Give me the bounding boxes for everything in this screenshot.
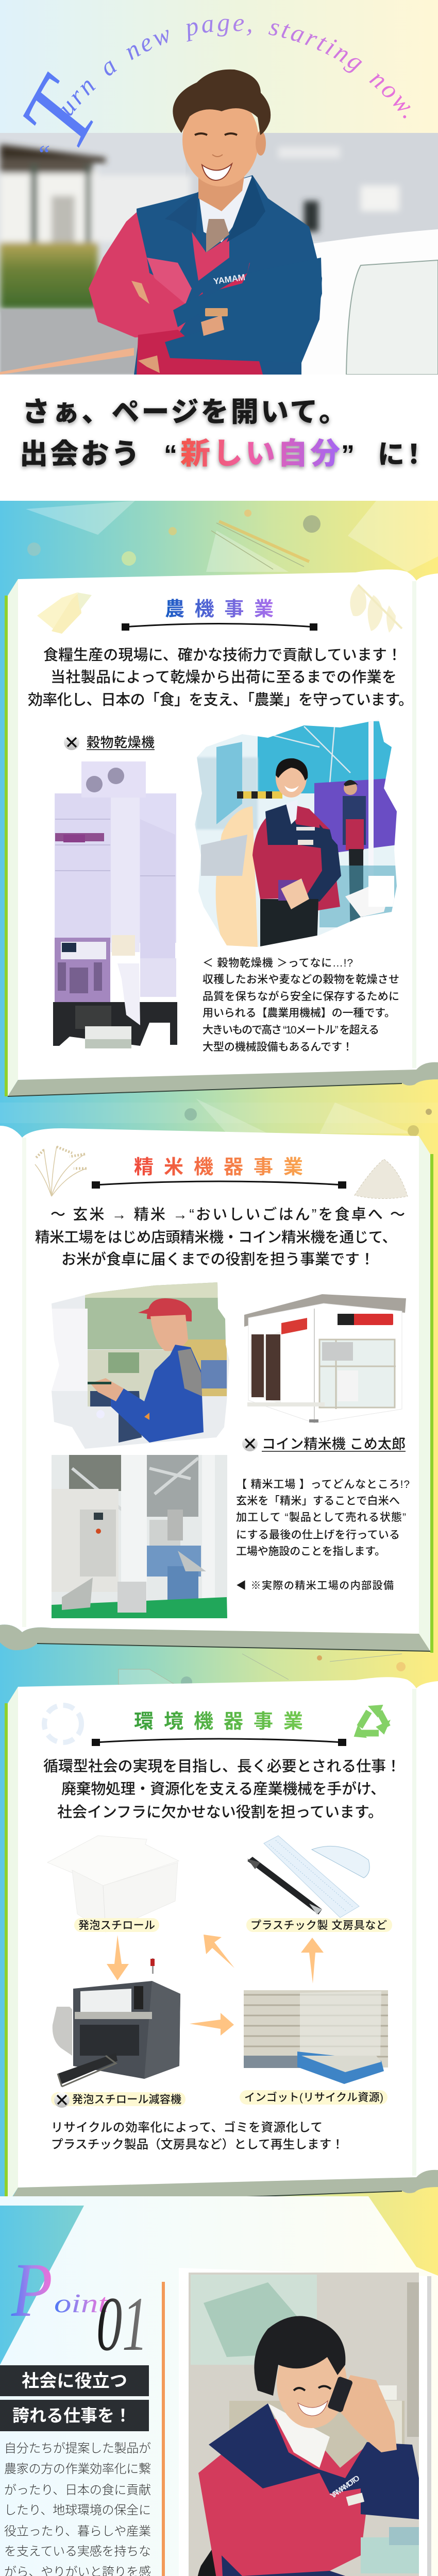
text block: what is a grain dryer: 収穫したお米や麦などの穀物を乾燥させ (203, 974, 399, 986)
point 01 heading: P (11, 2247, 53, 2333)
hero script text: Turn a new page, starting now.: “ (36, 140, 50, 168)
text block: what is a grain dryer: 用いられる【農業用機械】の一種です。 (203, 1007, 395, 1019)
point 01 heading bars: 社会に役立つ (22, 2371, 127, 2391)
text block: recycling explanation (51, 2121, 344, 2151)
text block: what is a rice mill: ◀ ※実際の精米工場の内部設備 (236, 1580, 394, 1591)
main headline: ” (341, 440, 355, 470)
pill: プラスチック製 文房具など: プラスチック製 文房具など (250, 1920, 387, 1931)
main headline: 新しい自分 (180, 437, 340, 470)
text block: rice milling intro: お米が食卓に届くまでの役割を担う事業です！ (61, 1251, 375, 1268)
text block: what is a grain dryer: 大型の機械設備もあるんです！ (203, 1041, 353, 1053)
text block: business intro: 効率化し、日本の「食」を支え、「農業」を守っています。 (28, 691, 413, 708)
text block: rice milling intro: ～ 玄米 → 精米 →“おいしいごはん”を食卓へ ～ (50, 1206, 405, 1223)
point 01 orange divider (162, 2282, 165, 2576)
point 01 heading bars (0, 2365, 149, 2431)
text block: what is a rice mill: 工場や施設のことを指します。 (236, 1546, 385, 1557)
arrow: up to stationery (301, 1938, 324, 1984)
text block: what is a rice mill (236, 1479, 410, 1591)
text block: business intro: 当社製品によって乾燥から出荷に至るまでの作業を (50, 669, 397, 686)
icon: rice grains pile (355, 1159, 408, 1199)
text block: what is a rice mill: 【 精米工場 】ってどんなところ!? (236, 1479, 410, 1490)
panel: agricultural machinery business book page (5, 569, 438, 1096)
heading: 精米機器事業: 精米機器事業 (134, 1157, 303, 1178)
point 01 body text: がったり、日本の食に貢献 (4, 2483, 151, 2497)
icon: corn (37, 592, 92, 634)
main headline (20, 397, 427, 470)
hero photo: smiling employee in front of white car: YAMAM (213, 273, 246, 286)
point 01 body text: を支えている実感を持ちな (4, 2545, 151, 2558)
connector (92, 1739, 346, 1746)
label: 穀物乾燥機: 穀物乾燥機 (87, 735, 155, 750)
point 01 heading: 01 (96, 2281, 148, 2367)
text block: what is a grain dryer (203, 957, 399, 1053)
point 01 body text (4, 2442, 151, 2576)
hero script text: Turn a new page, starting now. (0, 19, 410, 168)
photo: plastic stationery ruler protractor pen (247, 1836, 369, 1918)
heading: 農機事業: 農機事業 (165, 599, 274, 620)
arrow: right to ingots (190, 2013, 234, 2036)
label: コイン精米機 こめ太郎: コイン精米機 こめ太郎 (262, 1436, 406, 1452)
photo: pallets of recycled ingots (244, 1990, 388, 2084)
point 01 photo: employee on the phone (179, 2268, 431, 2576)
point 01 heading bars: 誇れる仕事を！ (12, 2406, 131, 2425)
text block: rice milling intro (35, 1206, 405, 1268)
panel: rice milling machinery business book page (0, 1126, 433, 1653)
pill: 発泡スチロール減容機: 発泡スチロール減容機 (72, 2094, 181, 2106)
pill: インゴット(リサイクル資源): インゴット(リサイクル資源) (244, 2091, 383, 2104)
icon: recycle (355, 1705, 390, 1737)
text block: what is a grain dryer: 品質を保ちながら安全に保存するために (203, 991, 399, 1003)
photo: styrofoam box (47, 1836, 179, 1932)
points section pale background with coloured wedges (0, 2196, 438, 2576)
text block: recycling explanation: プラスチック製品（文房具など）として再生します！ (51, 2138, 344, 2151)
photo: rice mill factory interior (52, 1455, 227, 1618)
photo: coin rice mill building こめ太郎 (244, 1294, 406, 1423)
panel: environmental machinery business book page (5, 1677, 438, 2206)
gradient background with faint book decoration (0, 501, 438, 2206)
pill: 発泡スチロール減容機 (51, 2092, 186, 2108)
icon: soybean (350, 585, 402, 633)
pill: 発泡スチロール: 発泡スチロール (78, 1920, 155, 1931)
text block: environmental intro (43, 1758, 401, 1821)
text block: environmental intro: 廃棄物処理・資源化を支える産業機械を手がけ、 (61, 1781, 385, 1798)
text block: what is a grain dryer: 大きいもので高さ “10メートル” を超える (203, 1024, 379, 1036)
text block: what is a rice mill: 加工して “製品として売れる状態” (236, 1512, 406, 1523)
main headline: さぁ、ページを開いて。 (22, 397, 347, 428)
heading: 環境機器事業: 環境機器事業 (134, 1711, 303, 1733)
text block: recycling explanation: リサイクルの効率化によって、ゴミを資源化して (51, 2121, 323, 2134)
icon: plastic bottles (44, 1705, 81, 1742)
arrow: down to reducer machine (107, 1935, 129, 1980)
text block: what is a grain dryer: ＜ 穀物乾燥機 ＞ってなに…!? (203, 957, 353, 969)
text block: business intro (28, 647, 413, 708)
text block: rice milling intro: 精米工場をはじめ店頭精米機・コイン精米機を通じて、 (35, 1229, 397, 1246)
photo: grain dryer machine (53, 761, 177, 1048)
point 01 body text: したり、地球環境の保全に (4, 2503, 151, 2517)
text block: what is a rice mill: 玄米を「精米」することで白米へ (236, 1495, 400, 1507)
photo: styrofoam volume reducing machine (53, 1958, 180, 2087)
text block: what is a rice mill: にする最後の仕上げを行っている (236, 1529, 400, 1541)
icon: rice plant (35, 1146, 87, 1196)
point 01 heading: oint (54, 2289, 109, 2318)
text block: environmental intro: 循環型社会の実現を目指し、長く必要とされる仕事！ (43, 1758, 401, 1775)
main headline: に！ (378, 440, 427, 470)
hero photo: smiling employee in front of white car (0, 0, 438, 375)
text block: environmental intro: 社会インフラに欠かせない役割を担っています。 (57, 1804, 383, 1821)
text block: business intro: 食糧生産の現場に、確かな技術力で貢献しています！ (43, 647, 402, 664)
point 01 heading (11, 2247, 148, 2367)
point 01 body text: 役立ったり、暮らしや産業 (4, 2524, 151, 2538)
point 01 body text: 農家の方の作業効率化に繋 (4, 2462, 151, 2476)
connector (92, 1181, 346, 1189)
point 01 body text: 自分たちが提案した製品が (4, 2442, 151, 2455)
photo: technician in red cap (52, 1282, 229, 1449)
main headline: 出会おう (20, 438, 140, 470)
point 01 photo: employee on the phone: YAMAMOTO (329, 2473, 362, 2500)
connector (122, 623, 317, 631)
photo: salesperson at event (195, 720, 398, 947)
arrow: up left to styrofoam (204, 1935, 234, 1968)
hero script text: Turn a new page, starting now.: T (0, 60, 123, 165)
main headline: “ (164, 440, 177, 470)
